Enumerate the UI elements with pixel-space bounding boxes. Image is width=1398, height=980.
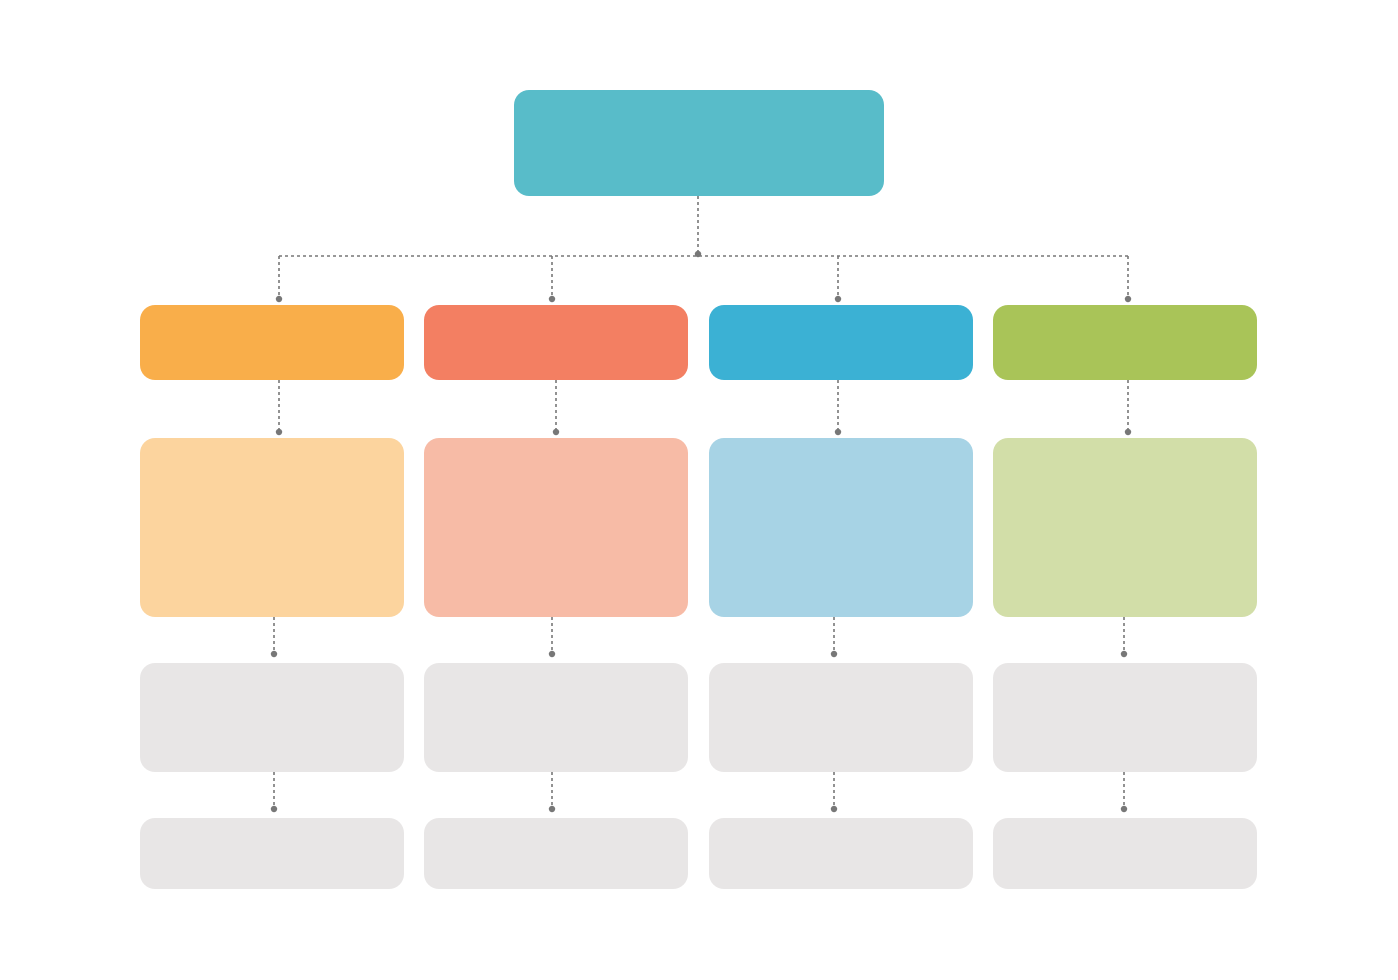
- connector: root to branches: [274, 196, 1129, 809]
- row 3: gray panels: [140, 663, 1257, 772]
- row 2: light colored panels: [140, 438, 1257, 617]
- row 1: colored headers: [140, 305, 1257, 380]
- root box: [514, 90, 884, 196]
- connector dots: [271, 251, 1131, 812]
- row 4: gray footers: [140, 818, 1257, 889]
